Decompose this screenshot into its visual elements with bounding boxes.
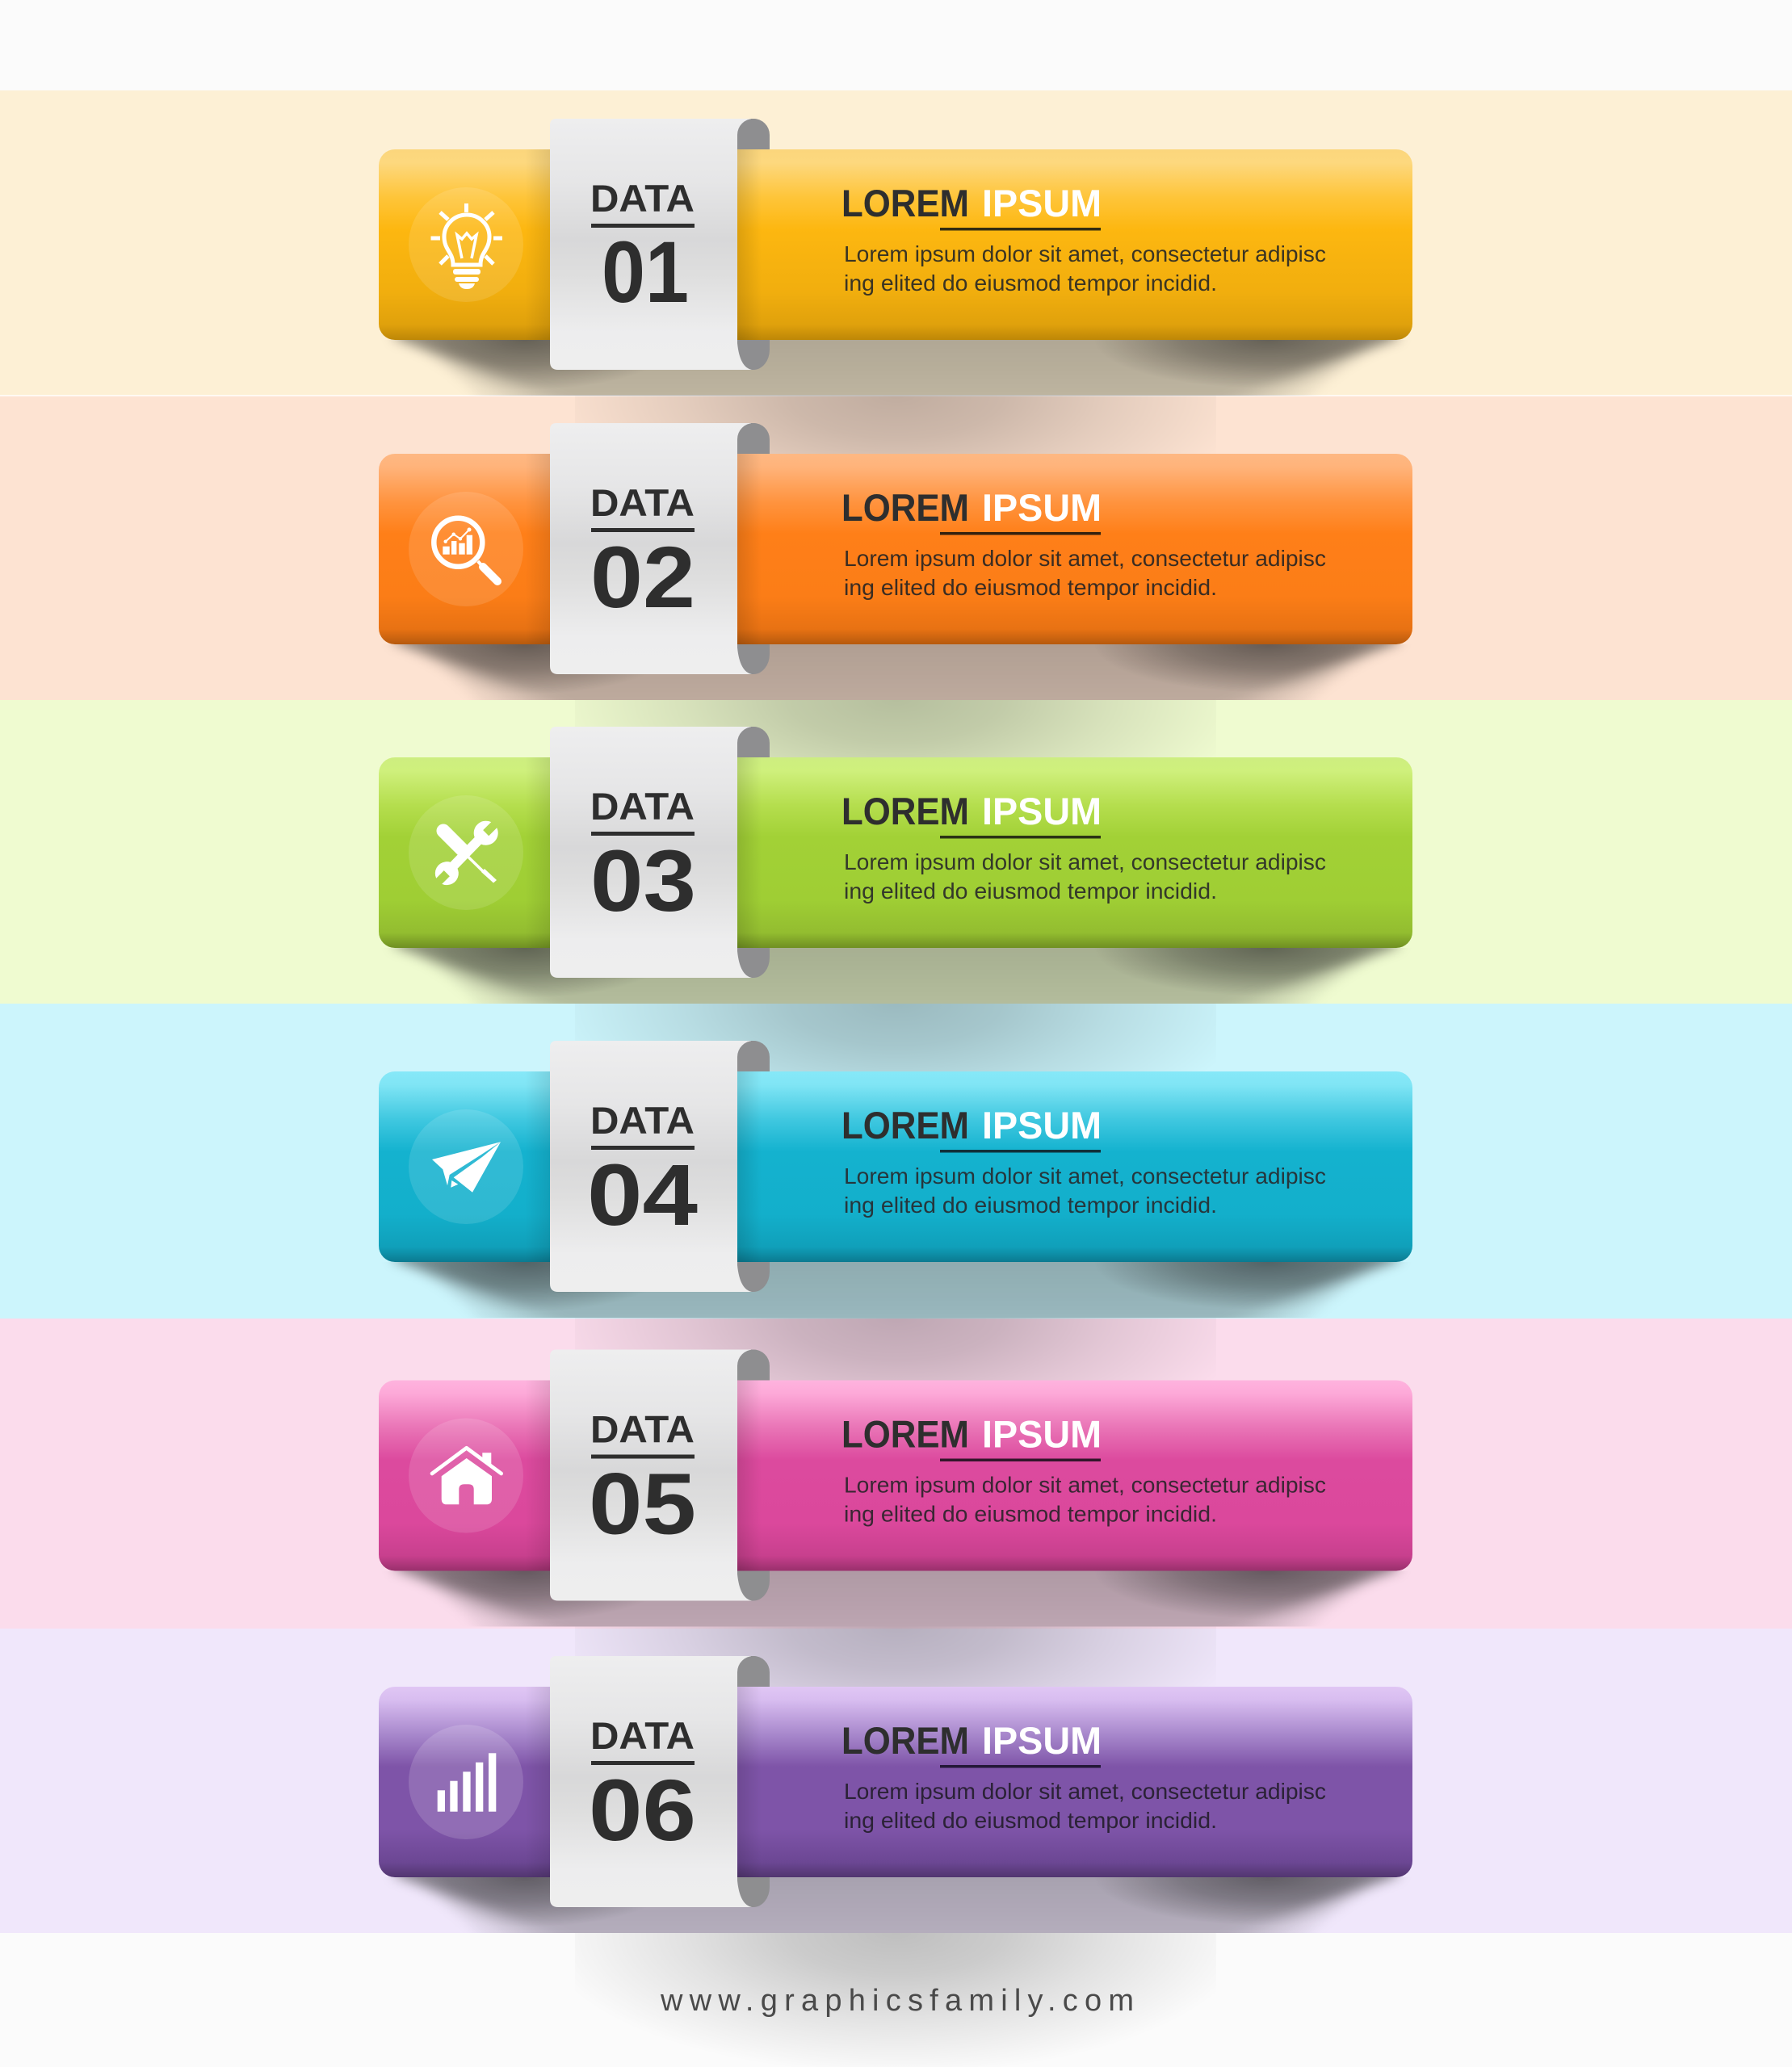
text block 04: LOREM xyxy=(841,1104,969,1147)
text block 03: LOREM xyxy=(841,790,969,832)
number card 06 xyxy=(525,1656,770,1907)
text block 06: LOREM xyxy=(841,1719,969,1762)
panel: data 03 xyxy=(379,727,1412,978)
number card 04 xyxy=(525,1041,770,1292)
card tab 06 xyxy=(727,1656,770,1907)
panel: data 02 xyxy=(379,423,1412,674)
text block 01: ing elited do eiusmod tempor incidid. xyxy=(844,270,1217,296)
icon: magnifier with chart xyxy=(409,492,523,606)
number card 05: DATA xyxy=(590,1408,695,1450)
number card 04: DATA xyxy=(590,1099,695,1142)
card tab 02 xyxy=(727,423,770,674)
text block 04: ing elited do eiusmod tempor incidid. xyxy=(844,1193,1217,1218)
text block 02 xyxy=(841,486,1326,600)
website footer: www.graphicsfamily.com xyxy=(660,1984,1134,2018)
number card 04: 04 xyxy=(587,1146,698,1243)
text block 05: IPSUM xyxy=(982,1413,1102,1455)
card tab 03 xyxy=(727,727,770,978)
card tab 04 xyxy=(727,1041,770,1292)
icon: paper plane xyxy=(409,1109,523,1224)
text block 06: IPSUM xyxy=(982,1719,1102,1762)
text block 05: Lorem ipsum dolor sit amet, consectetur adipisc xyxy=(844,1473,1326,1497)
number card 03: 03 xyxy=(590,832,696,929)
card tab 05 xyxy=(727,1350,770,1600)
number card 06: DATA xyxy=(590,1714,695,1757)
text block 06 xyxy=(841,1719,1326,1833)
number card 03: DATA xyxy=(590,785,695,828)
panel: data 05 xyxy=(379,1350,1412,1600)
text block 01: Lorem ipsum dolor sit amet, consectetur adipisc xyxy=(844,241,1326,266)
text block 01 xyxy=(841,182,1326,296)
bar 04 xyxy=(379,1071,1412,1262)
icon: house xyxy=(409,1418,523,1532)
text block 05: ing elited do eiusmod tempor incidid. xyxy=(844,1502,1217,1526)
number card 05: 05 xyxy=(589,1455,696,1552)
panel: data 06 xyxy=(379,1656,1412,1907)
bar 06 xyxy=(379,1687,1412,1877)
icon: rising bars xyxy=(409,1725,523,1839)
panel: data 01 xyxy=(379,119,1412,370)
number card 02: 02 xyxy=(590,528,695,626)
text block 03 xyxy=(841,790,1326,904)
icon: wrench and screwdriver xyxy=(409,795,523,910)
bar 03 xyxy=(379,757,1412,948)
bar 01 xyxy=(379,149,1412,340)
text block 04: IPSUM xyxy=(982,1104,1102,1147)
text block 03: Lorem ipsum dolor sit amet, consectetur adipisc xyxy=(844,849,1326,874)
text block 05 xyxy=(841,1413,1326,1526)
panel: data 04 xyxy=(379,1041,1412,1292)
text block 01: LOREM xyxy=(841,182,969,224)
number card 01 xyxy=(525,119,770,370)
text block 01: IPSUM xyxy=(982,182,1102,224)
number card 06: 06 xyxy=(589,1761,696,1859)
card tab 01 xyxy=(727,119,770,370)
number card 01: 01 xyxy=(602,223,689,321)
text block 04 xyxy=(841,1104,1326,1218)
number card 02: DATA xyxy=(590,481,695,524)
text block 02: LOREM xyxy=(841,486,969,529)
text block 05: LOREM xyxy=(841,1413,969,1455)
text block 02: ing elited do eiusmod tempor incidid. xyxy=(844,575,1217,600)
text block 03: ing elited do eiusmod tempor incidid. xyxy=(844,878,1217,904)
number card 02 xyxy=(525,423,770,674)
text block 06: Lorem ipsum dolor sit amet, consectetur adipisc xyxy=(844,1779,1326,1804)
shadows cast by the bars xyxy=(355,254,1442,2067)
number card 03 xyxy=(525,727,770,978)
text block 02: Lorem ipsum dolor sit amet, consectetur adipisc xyxy=(844,546,1326,571)
bar 02 xyxy=(379,454,1412,644)
number card 01: DATA xyxy=(590,177,695,220)
text block 02: IPSUM xyxy=(982,486,1102,529)
text block 06: ing elited do eiusmod tempor incidid. xyxy=(844,1808,1217,1833)
bar 05 xyxy=(379,1381,1412,1571)
text block 04: Lorem ipsum dolor sit amet, consectetur adipisc xyxy=(844,1163,1326,1189)
number card 05 xyxy=(525,1350,770,1600)
text block 03: IPSUM xyxy=(982,790,1102,832)
icon: light bulb xyxy=(409,187,523,302)
